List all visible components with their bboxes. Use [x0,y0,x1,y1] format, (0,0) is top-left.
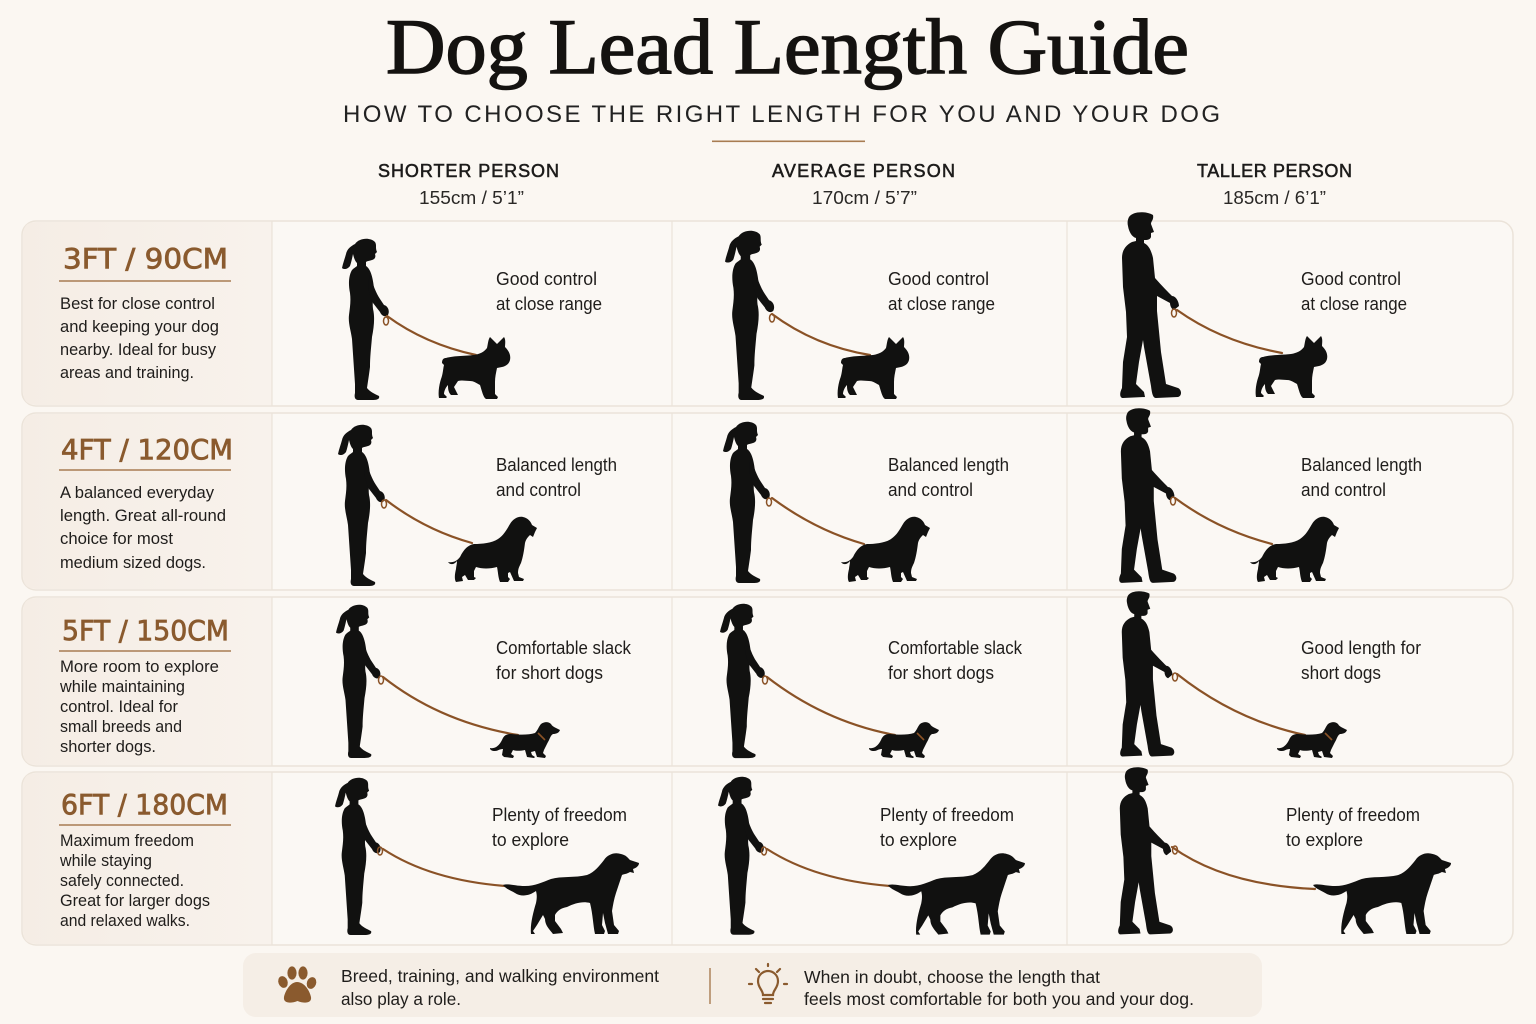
cell: average person with 3ft lead: Good control [888,269,989,289]
cell: average person with 6ft lead [718,777,1025,935]
cell: shorter person with 6ft lead [335,778,639,935]
cell: average person with 4ft lead [723,422,1009,583]
cell: taller person with 4ft lead: Balanced length [1301,455,1422,475]
description: 6ft: while staying [59,851,152,870]
subtitle: HOW TO CHOOSE THE RIGHT LENGTH FOR YOU AND YOUR DOG [343,101,1220,128]
cell: shorter person with 6ft lead: to explore [492,830,569,850]
panel: footer tips [243,953,1262,1017]
column heading: taller person: TALLER PERSON [1197,161,1352,181]
cell: shorter person with 4ft lead [338,425,617,586]
cell: average person with 5ft lead: Comfortable slack [888,638,1023,658]
column heading: shorter person: 155cm / 5’1” [419,188,524,208]
description: 3ft: areas and training. [60,363,194,382]
panel: row 4ft [22,408,1513,590]
cell: taller person with 3ft lead: Good control [1301,269,1401,289]
description: 3ft [60,294,219,382]
column heading: average person [772,161,955,208]
icon: paw [277,966,318,1003]
description: 5ft: shorter dogs. [60,737,156,756]
cell: taller person with 6ft lead: to explore [1286,830,1363,850]
description: 4ft: choice for most [60,529,173,548]
cell: shorter person with 4ft lead: and control [496,480,581,500]
cell: taller person with 5ft lead: short dogs [1301,663,1381,683]
tip text: when in doubt: When in doubt, choose the length that [804,967,1100,987]
column heading: shorter person: SHORTER PERSON [378,161,559,181]
description: 6ft: Great for larger dogs [60,891,210,910]
cell: shorter person with 3ft lead: Good control [496,269,597,289]
tip text: breed [341,966,659,1009]
description: 6ft: and relaxed walks. [60,911,190,930]
description: 4ft: A balanced everyday [60,483,214,502]
description: 4ft: length. Great all-round [60,506,226,525]
description: 4ft [60,483,226,572]
column heading: taller person [1197,161,1352,208]
cell: shorter person with 3ft lead [342,239,602,400]
cell: shorter person with 4ft lead: Balanced length [496,455,617,475]
cell: average person with 4ft lead: and control [888,480,973,500]
cell: shorter person with 3ft lead: at close range [496,294,602,314]
length label: 6ft: 6FT / 180CM [61,788,228,821]
cell: average person with 3ft lead: at close range [888,294,995,314]
cell: shorter person with 6ft lead: Plenty of freedom [492,805,627,825]
description: 5ft: while maintaining [59,677,185,696]
cell: taller person with 3ft lead: at close range [1301,294,1407,314]
column heading: average person: AVERAGE PERSON [772,161,955,181]
description: 6ft: Maximum freedom [60,831,194,850]
cell: average person with 5ft lead [720,604,1023,758]
cell: average person with 6ft lead: to explore [880,830,957,850]
tip text: when in doubt: feels most comfortable for both you and your dog. [804,989,1194,1009]
cell: taller person with 4ft lead: and control [1301,480,1386,500]
tip text: breed: also play a role. [341,989,461,1009]
column heading: shorter person [378,161,559,208]
description: 3ft: nearby. Ideal for busy [60,340,216,359]
tip text: when in doubt [804,967,1194,1009]
length label: 4ft: 4FT / 120CM [61,433,233,466]
title: Dog Lead Length Guide [386,3,1189,90]
icon: light bulb [749,964,787,1003]
cell: taller person with 4ft lead [1119,408,1422,583]
length label: 5ft: 5FT / 150CM [62,614,229,647]
description: 5ft: control. Ideal for [60,697,178,716]
cell: shorter person with 5ft lead: Comfortable slack [496,638,632,658]
cell: shorter person with 5ft lead [336,605,632,758]
cell: average person with 6ft lead: Plenty of freedom [880,805,1014,825]
description: 5ft [59,657,219,756]
cell: taller person with 6ft lead [1118,767,1451,934]
description: 3ft: Best for close control [60,294,215,313]
cell: average person with 4ft lead: Balanced length [888,455,1009,475]
column heading: average person: 170cm / 5’7” [812,188,917,208]
cell: shorter person with 5ft lead: for short dogs [496,663,603,683]
panel: row 6ft [22,767,1513,945]
cell: average person with 5ft lead: for short dogs [888,663,994,683]
cell: taller person with 5ft lead: Good length for [1301,638,1421,658]
description: 5ft: More room to explore [60,657,219,676]
panel: row 3ft [22,212,1513,406]
panel: row 5ft [22,591,1513,766]
description: 5ft: small breeds and [60,717,182,736]
cell: taller person with 3ft lead [1120,212,1407,398]
description: 3ft: and keeping your dog [60,317,219,336]
description: 4ft: medium sized dogs. [60,553,206,572]
description: 6ft [59,831,210,930]
tip text: breed: Breed, training, and walking environment [341,966,659,986]
column heading: taller person: 185cm / 6’1” [1223,188,1326,208]
description: 6ft: safely connected. [60,871,184,890]
length label: 3ft: 3FT / 90CM [63,242,228,275]
cell: average person with 3ft lead [725,231,995,400]
cell: taller person with 6ft lead: Plenty of freedom [1286,805,1420,825]
cell: taller person with 5ft lead [1120,591,1421,758]
